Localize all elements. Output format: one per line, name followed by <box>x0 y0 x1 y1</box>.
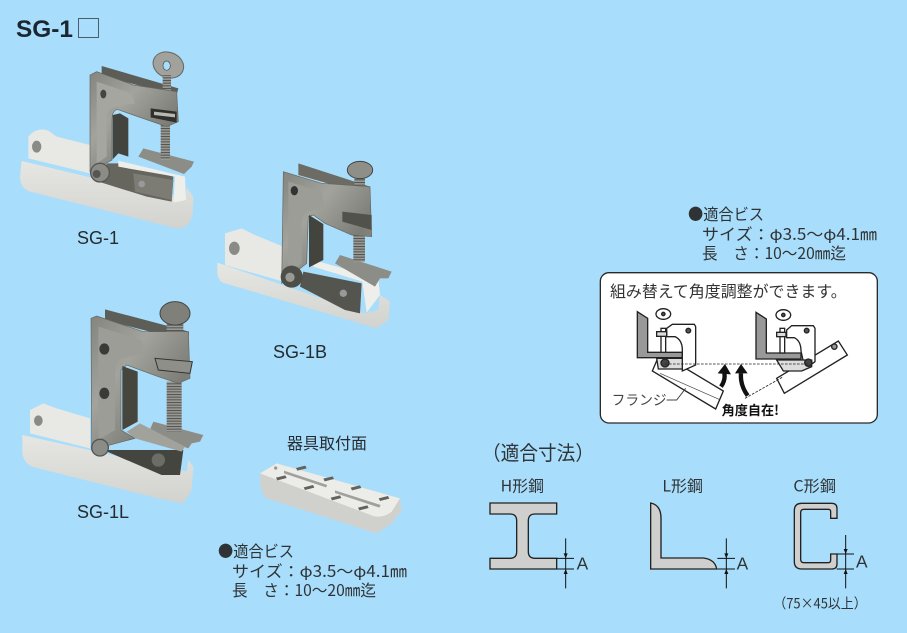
note: minimum size: （75×45以上） <box>773 593 867 613</box>
label: mounting face: 器具取付面 <box>287 430 367 454</box>
label: SG-1L: SG-1L <box>77 502 129 522</box>
panel heading: 組み替えて角度調整ができます。 <box>610 278 847 302</box>
product photo: SG-1B <box>217 161 392 328</box>
product photo: mounting face <box>260 463 402 533</box>
title: SG-1 <box>16 16 73 43</box>
label: flange: フランジ <box>612 390 667 410</box>
section: H steel: A <box>577 553 589 573</box>
spec: screws, upper: 長 さ：10～20㎜迄 <box>702 240 846 264</box>
label: SG-1: SG-1 <box>77 228 119 248</box>
diagram: right bracket <box>756 310 847 393</box>
diagram: left bracket <box>637 309 723 409</box>
panel: angle adjustment <box>600 273 877 423</box>
spec: screws, lower <box>218 538 407 601</box>
spec: screws, lower: サイズ：φ3.5～φ4.1㎜ <box>232 558 407 582</box>
spec: screws, upper <box>688 201 877 264</box>
heading: compatible dimensions: （適合寸法） <box>482 437 594 466</box>
arrows: angle change <box>718 364 748 396</box>
dashed reference lines <box>665 364 808 398</box>
product photo: SG-1 <box>20 47 194 228</box>
label: free angle: 角度自在! <box>722 400 779 419</box>
product photo: SG-1L <box>22 302 203 503</box>
section: L steel: A <box>737 553 749 573</box>
section: C steel <box>773 475 868 613</box>
section: C steel: C形鋼 <box>793 475 836 497</box>
spec: screws, upper: ●適合ビス <box>688 201 764 225</box>
label: SG-1B: SG-1B <box>273 342 327 362</box>
spec: screws, lower: 長 さ：10～20㎜迄 <box>232 577 376 601</box>
spec: screws, upper: サイズ：φ3.5～φ4.1㎜ <box>702 221 877 245</box>
spec: screws, lower: ●適合ビス <box>218 538 294 562</box>
title <box>16 16 98 43</box>
section: L steel: L形鋼 <box>662 475 703 497</box>
section: C steel: A <box>856 551 868 571</box>
section: L steel <box>651 475 749 588</box>
section: H steel: H形鋼 <box>501 475 544 497</box>
section: H steel <box>490 475 589 588</box>
